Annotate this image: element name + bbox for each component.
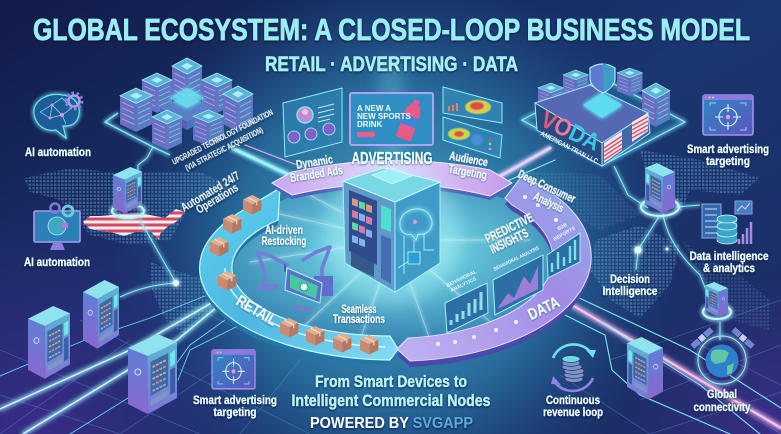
label: global connectivity: Global (707, 387, 737, 401)
label: chart captions: BEHAVIORAL ANALYSIS (493, 245, 541, 273)
label: audience targeting: Targeting (447, 164, 488, 182)
icon: smart targeting window (top right) (703, 95, 753, 135)
neon light trails: bottom right (565, 296, 781, 434)
label: continuous revenue loop (543, 393, 603, 419)
gear (66, 93, 82, 109)
label: AI-driven restocking: AI-driven (265, 225, 303, 237)
VODA logotype: VODA (536, 106, 604, 157)
label: audience targeting (447, 151, 489, 182)
label: AI-driven restocking: Restocking (262, 236, 306, 248)
satellite right (731, 327, 755, 349)
label: chart captions: ANALYTICS (450, 276, 478, 294)
heat blob lower (448, 128, 483, 146)
heat blob upper (465, 100, 491, 114)
product window (349, 190, 377, 265)
icon: AI automation monitor (34, 204, 80, 250)
icon: smart targeting window (bottom) (212, 350, 255, 389)
flags (604, 113, 648, 163)
label: upgraded technology foundation: UPGRADED TECHNOLOGY FOUNDATION (170, 107, 275, 167)
subtitle: RETAIL · ADVERTISING · DATA (265, 53, 518, 76)
label: automated operations: Operations (194, 182, 241, 217)
USA flag map (83, 209, 185, 240)
label: predictive insights: PREDICTIVE (482, 210, 536, 246)
label: decision intelligence: Intelligence (602, 284, 658, 298)
powered by SVGAPP: POWERED BY SVGAPP (310, 415, 473, 432)
panel: audience heatmaps (443, 87, 502, 158)
label: AI automation (lower): AI automation (24, 255, 90, 269)
platform outline (522, 78, 685, 165)
satellite left (690, 327, 714, 349)
label: decision intelligence: Decision (610, 272, 650, 286)
machine brain circuit (398, 209, 434, 274)
label: dynamic branded ads (289, 154, 344, 185)
panel: dynamic branded ads (283, 88, 342, 157)
icon: drink bottle (396, 98, 425, 142)
label: data intelligence and analytics: & analytics (703, 261, 755, 275)
neon light trails: top connections (232, 145, 555, 182)
server racks (538, 68, 670, 127)
panel: sports drink ad (350, 93, 433, 145)
label: seamless transactions: Seamless (342, 304, 376, 316)
server racks (120, 58, 253, 132)
neon light trails: bottom left (0, 296, 240, 434)
label: continuous revenue loop: Continuous (546, 393, 600, 407)
label: automated operations (179, 170, 242, 217)
robot arm right (303, 247, 333, 296)
ad headline: DRINK (357, 120, 383, 129)
label: upgraded technology foundation (170, 107, 275, 173)
label: chart captions: BEHAVIORAL (446, 269, 478, 289)
machine rings (112, 198, 731, 319)
label: seamless transactions: Transactions (333, 314, 385, 326)
network nodes (173, 246, 668, 286)
starburst rays (250, 190, 530, 340)
label: AI-driven restocking (262, 225, 306, 248)
glowing core platform (160, 88, 214, 130)
robot arm left (257, 252, 287, 287)
label: dynamic branded ads: Dynamic (295, 154, 334, 172)
vending machines on the network (28, 163, 728, 414)
label: decision intelligence (602, 272, 658, 298)
VODA American Tran LLC building (522, 63, 685, 166)
label: chart captions: B2B (557, 222, 569, 232)
icon: globe with satellites (690, 327, 755, 384)
advertising band arrow (272, 160, 512, 200)
icon: continuous revenue loop coins (551, 344, 596, 391)
label: smart advertising targeting (bottom) (193, 393, 277, 419)
label: data intelligence and analytics (690, 249, 769, 275)
label: AI automation (top): AI automation (25, 145, 91, 159)
label: audience targeting: Audience (448, 151, 489, 169)
ring floor (223, 180, 567, 344)
heading: advertising: ADVERTISING (352, 148, 432, 168)
ad headline (357, 104, 411, 129)
label: predictive insights (482, 210, 536, 257)
label: smart advertising targeting (bottom): targeting (214, 405, 256, 419)
panel: retail robots and payment monitor (257, 247, 333, 312)
data panels (445, 233, 580, 333)
tagline (292, 372, 490, 410)
chart panel: behavioral analysis (493, 255, 543, 315)
central smart vending machine (322, 165, 462, 305)
label: smart advertising targeting (top right): targeting (706, 154, 750, 168)
retail ring arrow (200, 188, 398, 365)
label: dynamic branded ads: Branded Ads (289, 165, 344, 185)
network connection lines (120, 147, 720, 340)
icon: AI brain with gear (34, 93, 82, 138)
tagline: From Smart Devices to (315, 372, 467, 391)
label: chart captions: REPORTS (553, 225, 577, 243)
tagline: Intelligent Commercial Nodes (292, 391, 490, 410)
ad headline: A NEW A (357, 104, 391, 113)
platform outline (105, 113, 170, 155)
label: global connectivity (694, 387, 751, 414)
label: deep consumer analysis: Analysis (531, 191, 565, 215)
machine top hologram (372, 168, 412, 184)
dotted world map (24, 150, 770, 335)
building block (535, 85, 650, 166)
payment monitor (285, 268, 322, 312)
label: chart captions (446, 222, 577, 294)
label: smart advertising targeting (top right) (687, 142, 769, 168)
front server racks (152, 110, 224, 150)
label: automated operations: Automated 24/7 (179, 170, 242, 215)
company name: AMERICAN TRAN LLC. (539, 131, 600, 166)
icon: data intelligence database (702, 201, 752, 244)
label: smart advertising targeting (bottom): Smart advertising (193, 393, 277, 407)
label: global connectivity: connectivity (694, 400, 751, 414)
label: seamless transactions (333, 304, 385, 326)
label: upgraded technology foundation: (VIA STRATEGIC ACQUISITION) (183, 125, 265, 173)
perspective floor grid (0, 300, 781, 434)
chart panel: behavioral analytics (445, 283, 488, 333)
label: deep consumer analysis: Deep Consumer (516, 169, 577, 206)
icon: shield (590, 63, 615, 93)
central vertical light beam (378, 60, 404, 160)
retail parcels on the conveyor (210, 195, 378, 355)
chart panel: reports (547, 233, 580, 278)
label: continuous revenue loop: revenue loop (543, 405, 603, 419)
ad headline: NEW SPORTS (357, 112, 411, 121)
data ring arrow (397, 176, 591, 367)
left technology foundation server cluster (105, 58, 253, 155)
label: predictive insights: INSIGHTS (487, 225, 531, 257)
heading: data: DATA (525, 294, 563, 324)
heading: retail: RETAIL (233, 293, 280, 330)
